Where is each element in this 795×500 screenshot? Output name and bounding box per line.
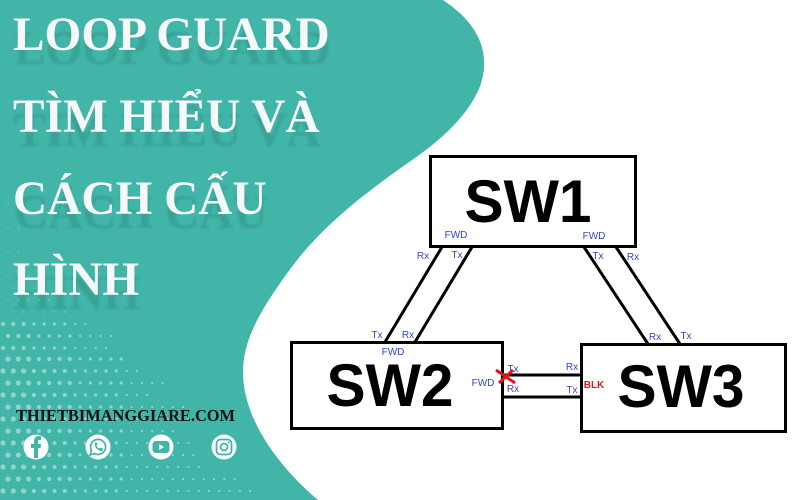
port labels: Tx	[680, 331, 692, 342]
port labels: FWD	[445, 230, 467, 241]
port labels: FWD	[583, 231, 605, 242]
title	[13, 9, 330, 309]
port labels: Rx	[627, 252, 639, 263]
port labels: Rx	[402, 330, 414, 341]
port labels: BLK	[584, 380, 605, 391]
port labels: FWD	[472, 378, 494, 389]
port labels: Rx	[649, 332, 661, 343]
port labels: Tx	[507, 364, 519, 375]
switch SW1	[430, 156, 636, 246]
port labels: FWD	[382, 347, 404, 358]
switch SW2	[292, 342, 502, 428]
port labels: Tx	[566, 385, 578, 396]
icon: instagram	[212, 434, 236, 460]
port labels: Tx	[451, 250, 463, 261]
port labels: Rx	[417, 251, 429, 262]
port labels	[371, 230, 692, 396]
title: HÌNH	[13, 254, 139, 306]
links between switches	[385, 247, 680, 397]
icon: youtube	[148, 434, 174, 460]
title: TÌM HIỂU VÀ	[13, 91, 320, 143]
switch SW3	[582, 344, 786, 432]
icon: facebook	[24, 434, 48, 460]
title: LOOP GUARD	[13, 9, 330, 61]
red X: blocked port	[496, 370, 515, 383]
icon: whatsapp	[86, 434, 110, 460]
port labels: Tx	[371, 330, 383, 341]
switch SW3: SW3	[618, 353, 744, 420]
title: CÁCH CẤU	[13, 173, 267, 225]
website text: THIETBIMANGGIARE.COM	[16, 406, 235, 425]
port labels: Rx	[566, 362, 578, 373]
port labels: Tx	[592, 251, 604, 262]
switch SW1: SW1	[464, 168, 592, 235]
port labels: Rx	[507, 384, 519, 395]
switch SW2: SW2	[326, 352, 454, 419]
